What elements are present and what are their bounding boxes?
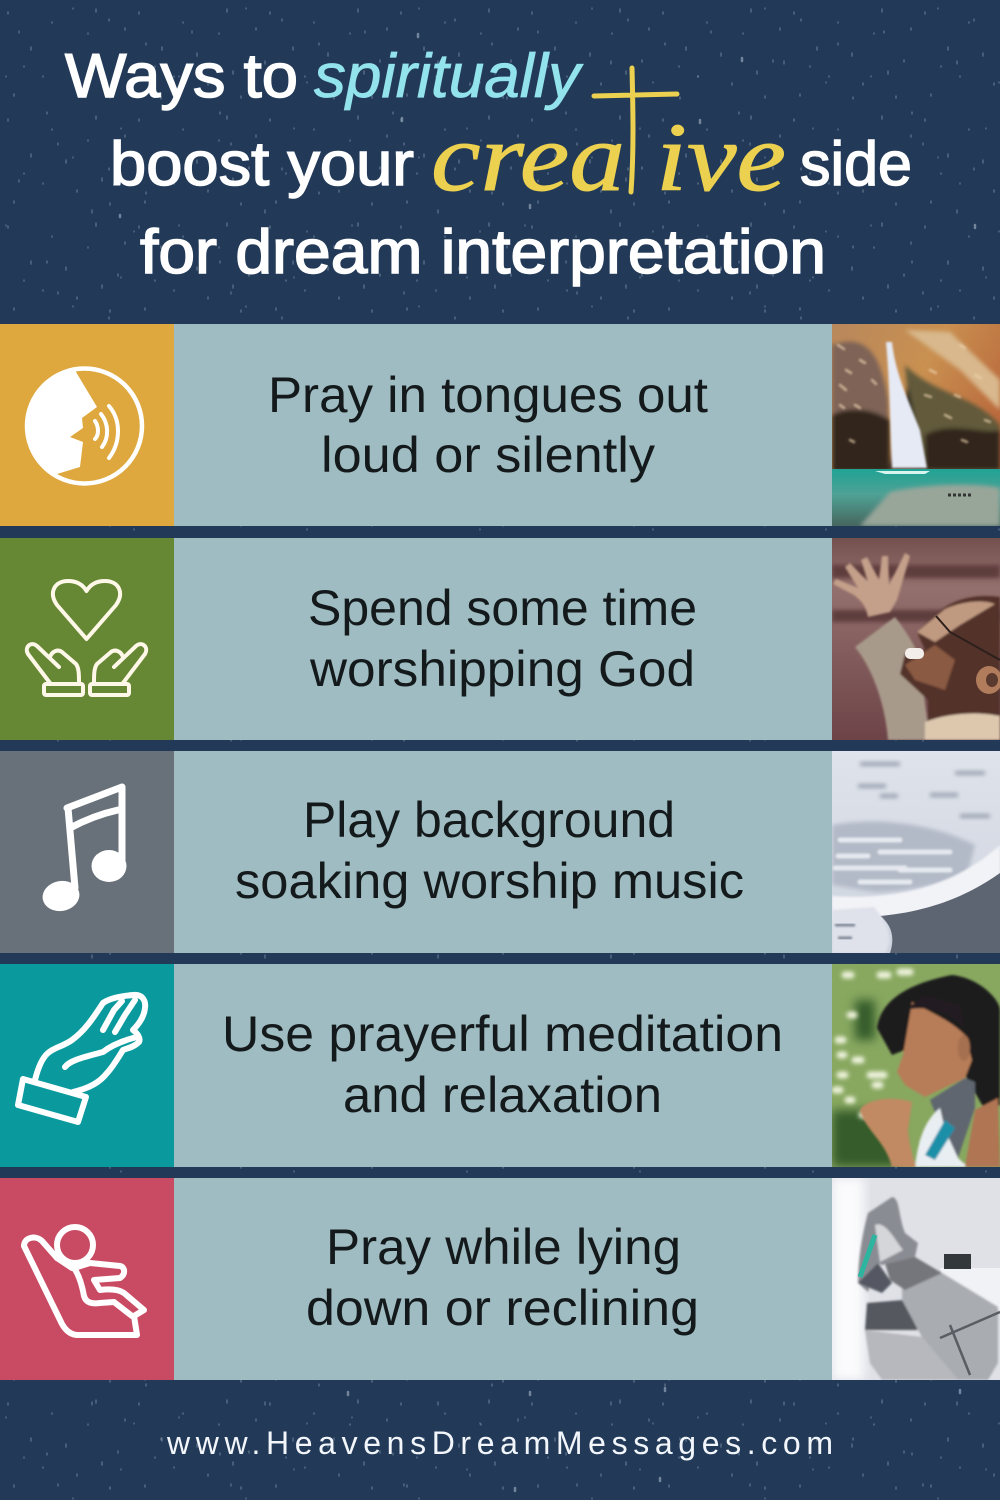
- text: worship: Spend some time: [308, 580, 697, 636]
- icon tile: music notes: [0, 751, 174, 953]
- text: pray in tongues: loud or silently: [321, 427, 655, 483]
- row 2: worship: [0, 538, 1000, 740]
- icon tile: speaking head: [0, 324, 174, 526]
- title: [65, 42, 912, 287]
- text: meditation: Use prayerful meditation: [222, 1006, 783, 1062]
- title line 2: boost your: [110, 130, 414, 199]
- text: music: soaking worship music: [235, 853, 744, 909]
- text: music: [235, 792, 744, 909]
- title line 3: for dream interpretation: [140, 218, 826, 287]
- title line 1: Ways to: [65, 42, 298, 111]
- row 3: music: [0, 751, 1000, 953]
- row 5: lying down: [0, 1178, 1000, 1380]
- photo: man worshipping: [832, 538, 1000, 740]
- text: lying down: down or reclining: [306, 1280, 699, 1336]
- text: lying down: [306, 1219, 699, 1336]
- photo: woman praying: [832, 964, 1000, 1167]
- text: music: Play background: [303, 792, 675, 848]
- footer: website address: www.HeavensDreamMessages.com: [166, 1425, 833, 1461]
- row 1: pray in tongues: [0, 324, 1000, 526]
- icon tile: reclining figure: [0, 1178, 174, 1380]
- title line 2: creative: [431, 104, 786, 212]
- photo: reclining legs and sneakers: [832, 1178, 1000, 1380]
- text: meditation: [222, 1006, 783, 1123]
- icon tile: heart above open hands: [0, 538, 174, 740]
- photo: waterfall: [832, 324, 1000, 526]
- text: worship: worshipping God: [309, 641, 695, 697]
- title line 2: [110, 68, 912, 212]
- icon tile: prayer hand: [0, 964, 174, 1167]
- photo: foamy ocean shore: [832, 751, 1000, 953]
- title line 1: spiritually: [314, 42, 584, 111]
- text: meditation: and relaxation: [343, 1067, 662, 1123]
- title line 2: side: [800, 130, 912, 199]
- text: pray in tongues: [268, 367, 708, 483]
- text: pray in tongues: Pray in tongues out: [268, 367, 708, 423]
- row 4: meditation: [0, 964, 1000, 1167]
- title line 1: [65, 42, 584, 111]
- text: lying down: Pray while lying: [326, 1219, 681, 1275]
- text: worship: [308, 580, 697, 697]
